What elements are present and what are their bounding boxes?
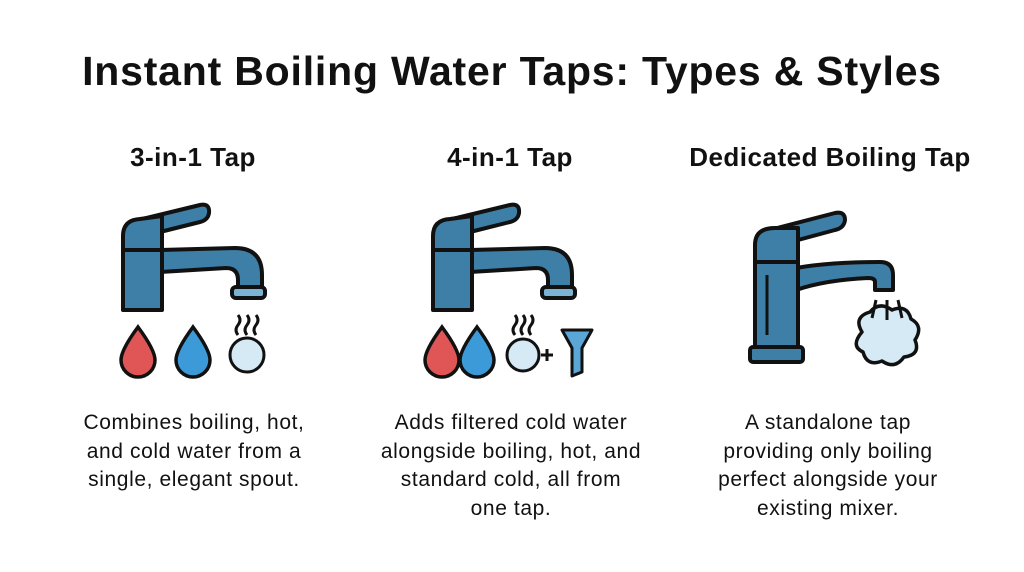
text: dedicated: providing only boiling	[723, 440, 933, 462]
text: 3-in-1: Combines boiling, hot,	[84, 411, 304, 434]
text: 4-in-1: standard cold, all from	[401, 468, 621, 491]
icon: boiling water	[230, 315, 264, 372]
icon: 3-in-1 tap	[121, 205, 265, 377]
title: Instant Boiling Water Taps: Types & Styles	[82, 48, 942, 94]
text: dedicated	[718, 411, 938, 520]
text: 3-in-1: and cold water from a	[87, 440, 301, 462]
text: 4-in-1: Adds filtered cold water	[395, 411, 627, 434]
text: dedicated: perfect alongside your	[718, 468, 938, 491]
text: 4-in-1: one tap.	[471, 496, 551, 520]
text: 3-in-1	[84, 411, 304, 491]
text: dedicated: existing mixer.	[757, 496, 899, 520]
heading: 4-in-1: 4-in-1 Tap	[447, 142, 573, 172]
heading: dedicated: Dedicated Boiling Tap	[689, 142, 971, 172]
icon: cold drop	[176, 327, 210, 377]
text: 3-in-1: single, elegant spout.	[88, 468, 300, 491]
icon: steam cloud	[856, 306, 919, 365]
text: 4-in-1	[381, 411, 641, 520]
heading: 3-in-1: 3-in-1 Tap	[130, 142, 256, 172]
text: 4-in-1: alongside boiling, hot, and	[381, 440, 641, 462]
icon: dedicated boiling tap	[750, 213, 919, 365]
icon: filter funnel	[562, 330, 592, 376]
icon: hot drop	[121, 327, 155, 377]
icon: 4-in-1 tap	[425, 205, 592, 377]
text: dedicated: A standalone tap	[745, 411, 911, 434]
